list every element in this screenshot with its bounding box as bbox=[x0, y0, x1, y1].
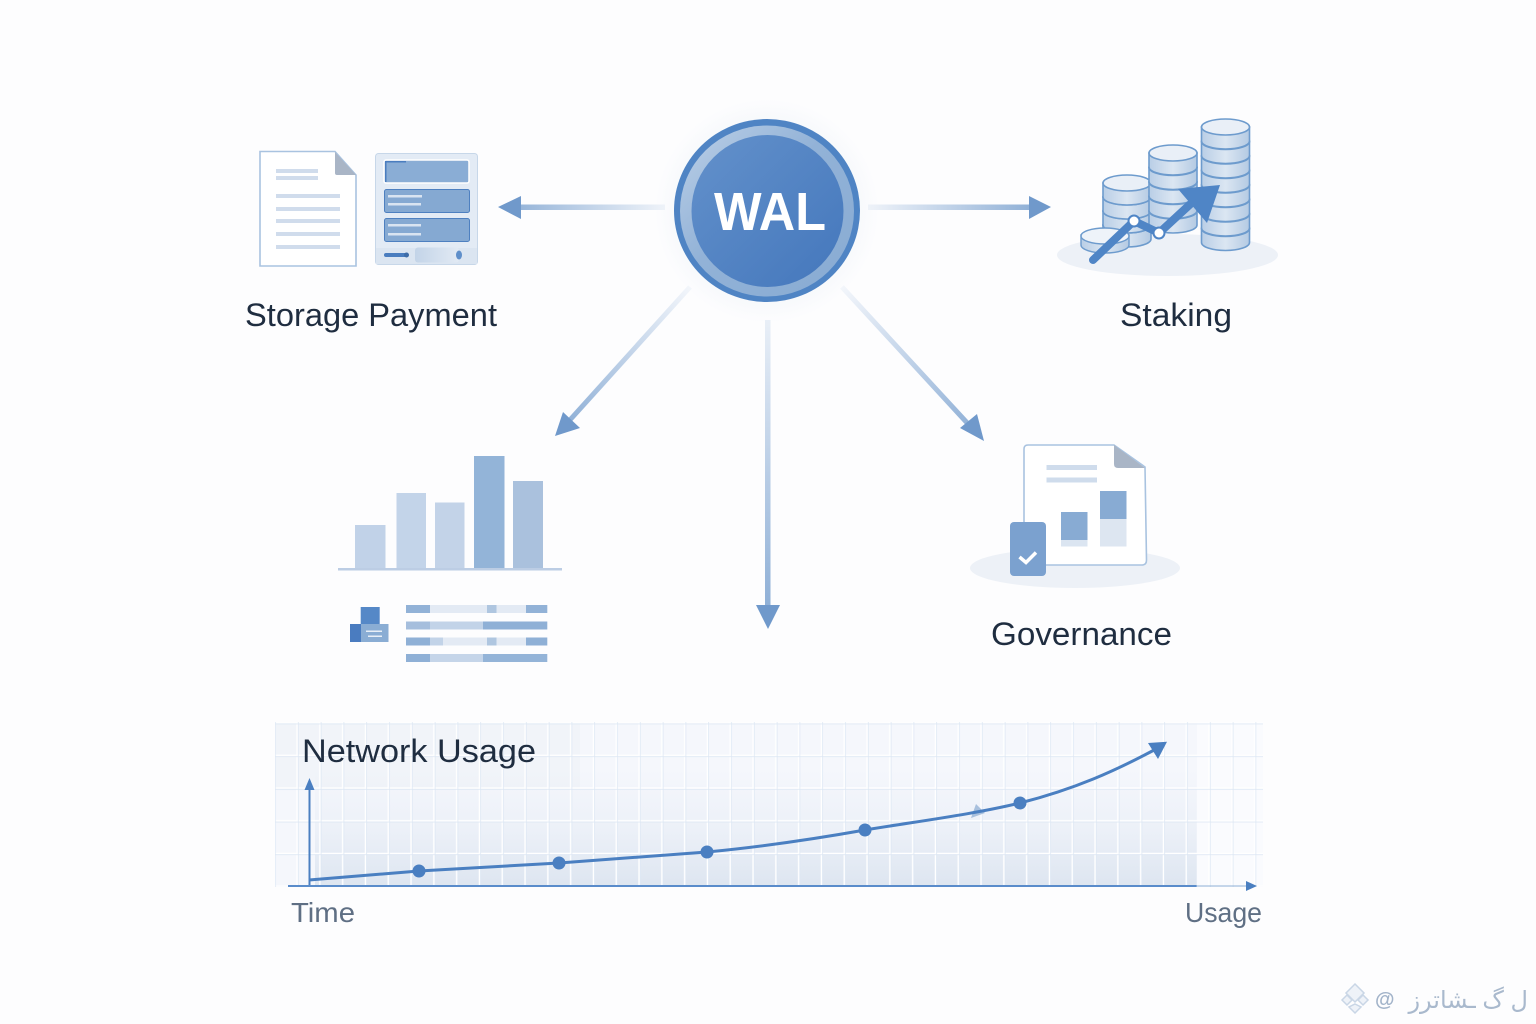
panel: network usage chart bbox=[275, 722, 1263, 891]
y axis bbox=[304, 778, 314, 887]
icon: governance document bbox=[970, 445, 1180, 588]
WAL label: WAL bbox=[714, 182, 826, 242]
label: Staking: Staking bbox=[1120, 297, 1232, 333]
usage growth curve bbox=[309, 742, 1167, 880]
arrow: to staking bbox=[868, 196, 1051, 219]
bar chart bbox=[338, 456, 562, 570]
label: Governance: Governance bbox=[991, 616, 1172, 652]
arrow: down to network usage bbox=[756, 320, 780, 629]
arrow: to analytics bbox=[555, 287, 690, 436]
data table bbox=[406, 605, 547, 662]
heading: Network Usage: Network Usage bbox=[302, 733, 536, 769]
WAL coin bbox=[655, 99, 879, 323]
label: Storage Payment: Storage Payment bbox=[245, 297, 497, 333]
x axis bbox=[288, 881, 1257, 891]
icon: storage server bbox=[376, 154, 478, 264]
icon: small ledger card bbox=[350, 607, 388, 642]
axis label: Usage: Usage bbox=[1185, 897, 1262, 928]
icon: storage document bbox=[260, 152, 356, 266]
icon: staking coins bbox=[1057, 119, 1278, 276]
axis label: Time: Time bbox=[291, 897, 355, 928]
arrow: to governance bbox=[842, 287, 984, 441]
arrow: to storage payment bbox=[498, 196, 665, 219]
watermark bbox=[1342, 984, 1528, 1014]
watermark: ل گ ـشاترز bbox=[1407, 986, 1528, 1014]
watermark: @ bbox=[1375, 989, 1395, 1011]
